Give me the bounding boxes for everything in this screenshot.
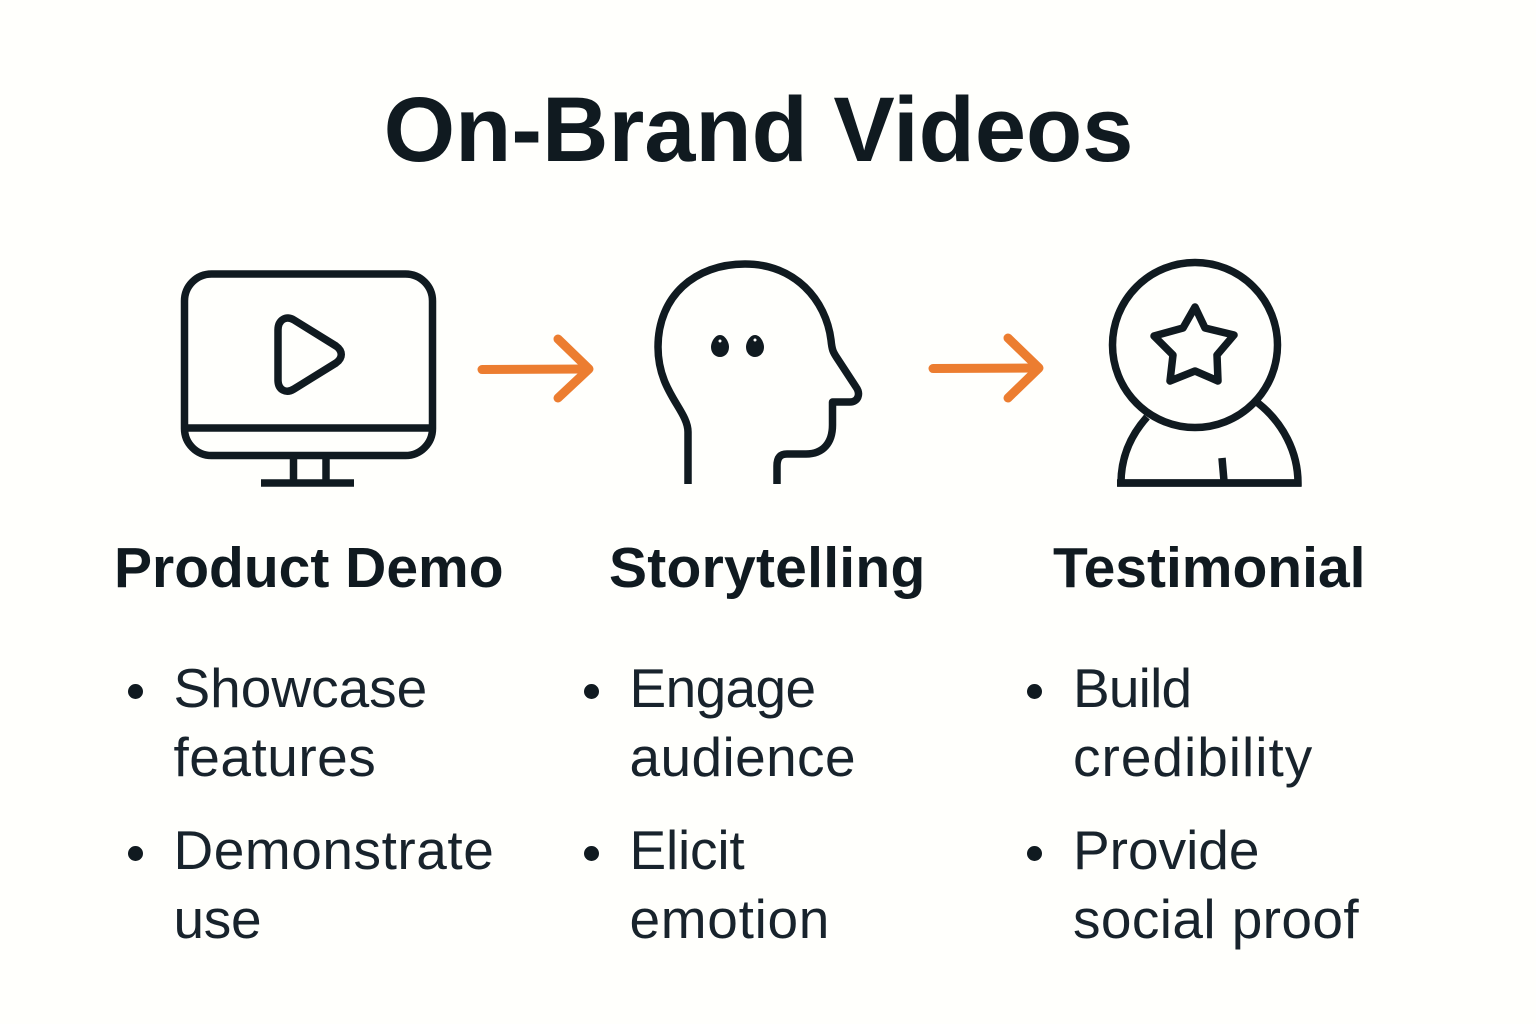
- list: Testimonial points: social proof: [1073, 888, 1359, 950]
- arrow: demo to story: [482, 339, 589, 398]
- heading: Product Demo: Product Demo: [114, 536, 504, 600]
- icon: testimonial star person: [1112, 262, 1301, 483]
- list: Storytelling points: Engage: [630, 657, 816, 719]
- title: On-Brand Videos: [384, 79, 1133, 181]
- list: Storytelling points: [584, 657, 856, 950]
- list: Testimonial points: Build: [1073, 657, 1191, 719]
- list: Storytelling points: audience: [630, 726, 856, 788]
- list: Testimonial points: Provide: [1073, 819, 1259, 881]
- list: Testimonial points: credibility: [1073, 726, 1313, 788]
- list: Product Demo points: features: [174, 726, 376, 788]
- icon: head profile: [658, 264, 858, 484]
- list: Product Demo points: Showcase: [174, 657, 427, 719]
- icon: video monitor: [184, 274, 433, 483]
- heading: Storytelling: Storytelling: [609, 536, 926, 600]
- list: Storytelling points: Elicit: [630, 819, 744, 881]
- icon: head eyes: [711, 335, 764, 357]
- list: Product Demo points: use: [174, 888, 261, 950]
- heading: Testimonial: Testimonial: [1053, 536, 1366, 600]
- arrow: story to testimonial: [933, 338, 1039, 398]
- list: Product Demo points: Demonstrate: [174, 819, 494, 881]
- list: Testimonial points: [1027, 657, 1359, 950]
- list: Storytelling points: emotion: [630, 888, 830, 950]
- list: Product Demo points: [128, 657, 494, 950]
